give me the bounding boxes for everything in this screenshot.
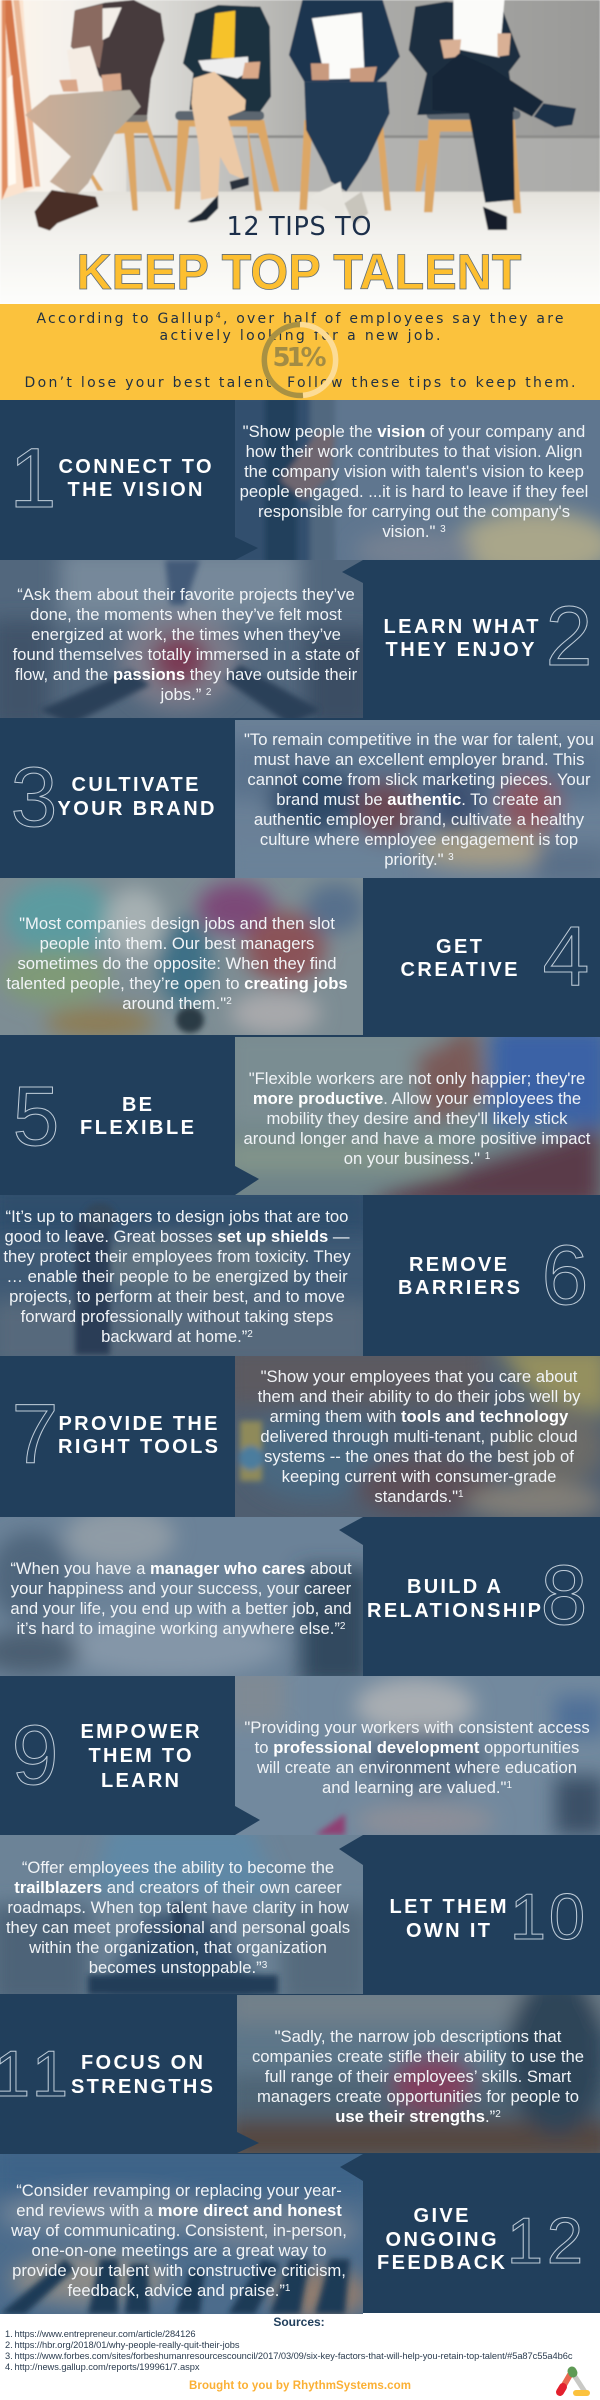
- sources list: https://hbr.org/2018/01/why-people-really-quit-their-jobs: [14, 2340, 240, 2350]
- quote: [244, 730, 594, 869]
- quote: companies create stifle their ability to use the: [252, 2047, 584, 2066]
- heading: BUILD A: [407, 1576, 501, 1598]
- quote: culture where employee engagement is top: [260, 830, 578, 849]
- quote: people engaged. ...it is hard to leave if they feel: [240, 482, 588, 501]
- quote: around longer and have a more positive impact: [244, 1129, 591, 1148]
- quote: use their strengths.”: [335, 2107, 495, 2126]
- sources heading: Sources:: [273, 2315, 325, 2329]
- sources list: https://www.forbes.com/sites/forbeshumanresourcescouncil/2017/03/09/six-key-factors-that-will-help-you-retain-top-talent/#5a87c55a4b6c: [14, 2351, 573, 2361]
- sources: [5, 2315, 573, 2372]
- quote: 1: [458, 1489, 464, 1500]
- panel: tip 5: [13, 1027, 600, 1207]
- intro text: actively looking for a new job.: [160, 328, 440, 344]
- heading: RIGHT TOOLS: [58, 1436, 218, 1458]
- quote: roadmaps. When top talent have clarity in how: [7, 1898, 350, 1917]
- title line: 12 tips to: 12 TIPS TO: [226, 212, 372, 242]
- quote: good to leave. Great bosses set up shields —: [4, 1227, 350, 1246]
- quote: way of communicating. Consistent, in-person,: [10, 2221, 347, 2240]
- heading: OWN IT: [406, 1920, 490, 1942]
- quote: [244, 1069, 591, 1168]
- quote: to professional development opportunities: [255, 1738, 579, 1757]
- heading: YOUR BRAND: [58, 798, 214, 820]
- donut chart: 51 percent: [264, 324, 336, 395]
- quote: vision.": [382, 522, 435, 541]
- quote: feedback, advice and praise.”: [68, 2281, 285, 2300]
- photo: figure on stairway: [0, 1835, 363, 1994]
- quote: mobility they desire and they'll likely stick: [267, 1109, 568, 1128]
- quote: "Sadly, the narrow job descriptions that: [275, 2027, 562, 2046]
- heading: ONGOING: [386, 2229, 496, 2251]
- heading: [80, 1721, 200, 1792]
- person 1: [71, 0, 165, 115]
- number 4: 4: [543, 909, 589, 1003]
- heading: BE: [122, 1094, 152, 1116]
- quote: “Offer employees the ability to become the: [22, 1858, 334, 1877]
- quote: cannot come from slick marketing pieces. Your: [247, 770, 591, 789]
- sources list: [5, 2329, 573, 2372]
- quote: 2: [495, 2109, 501, 2120]
- quote: flow, and the passions they have outside their: [15, 665, 358, 684]
- heading: THE VISION: [68, 479, 202, 501]
- photo: people shaking hands over papers: [0, 1517, 363, 1676]
- photo: man on ladder at a wall: [0, 1195, 363, 1356]
- heading: RELATIONSHIP: [367, 1600, 541, 1622]
- heading: [71, 2052, 213, 2098]
- credit line: Brought to you by RhythmSystems.com: [189, 2380, 411, 2392]
- quote: … enable their people to be energized by their: [6, 1267, 348, 1286]
- heading: [390, 1896, 506, 1942]
- quote: [6, 1858, 350, 1977]
- quote: within the organization, that organization: [28, 1938, 327, 1957]
- heading: [58, 1413, 218, 1458]
- panel: tip 2: [0, 550, 592, 730]
- number 5: 5: [13, 1069, 59, 1163]
- number 1: 1: [10, 431, 56, 525]
- quote: keeping current with consumer-grade: [282, 1467, 556, 1486]
- photo: blurred network of people: [235, 720, 600, 878]
- quote: becomes unstoppable.”: [89, 1958, 262, 1977]
- panel: tip 4: [0, 878, 589, 1039]
- quote: 3: [448, 852, 454, 863]
- sources list: 4.: [5, 2362, 13, 2372]
- intro text: [24, 311, 576, 391]
- number 7: 7: [12, 1387, 58, 1481]
- quote: 1: [285, 2283, 291, 2294]
- quote: "Providing your workers with consistent access: [244, 1718, 590, 1737]
- quote: sometimes do the opposite: When they find: [17, 954, 337, 973]
- quote: responsible for carrying out the company's: [258, 502, 570, 521]
- photo: hands holding light bulbs: [235, 1676, 600, 1835]
- heading: [367, 1576, 541, 1622]
- donut chart: 51 percent: 51%: [272, 343, 326, 373]
- header photo: four candidates seated on chairs: [0, 0, 600, 304]
- quote: 2: [206, 687, 212, 698]
- quote: people into them. Our best managers: [40, 934, 314, 953]
- icon: Rhythm Systems logo: [560, 2371, 587, 2393]
- number 12: 2: [547, 2204, 583, 2277]
- heading: FEEDBACK: [377, 2252, 506, 2274]
- panel: tip 12: [0, 2144, 583, 2319]
- quote: “Ask them about their favorite projects they’ve: [17, 585, 355, 604]
- quote: 1: [485, 1151, 491, 1162]
- quote: [6, 914, 348, 1013]
- panel: tip 10: [0, 1825, 585, 2005]
- heading: LET THEM: [390, 1896, 506, 1918]
- quote: forward professionally without taking steps: [21, 1307, 333, 1326]
- panel: tip 7: [12, 1346, 600, 1519]
- panel: tip 3: [11, 720, 600, 885]
- heading: FLEXIBLE: [80, 1117, 194, 1139]
- quote: your happiness and your success, your career: [11, 1579, 352, 1598]
- quote: found themselves totally immersed in a state of: [13, 645, 360, 664]
- heading: [400, 936, 518, 981]
- quote: jobs.”: [161, 685, 201, 704]
- quote: projects, to perform at their best, and to move: [9, 1287, 345, 1306]
- number 3: 3: [11, 750, 57, 844]
- quote: will create an environment where education: [256, 1758, 577, 1777]
- intro text: 4: [216, 311, 221, 320]
- panel: tip 8: [0, 1507, 587, 1687]
- quote: managers create opportunities for people to: [257, 2087, 579, 2106]
- panel: tip 1: [10, 395, 600, 580]
- heading: THEM TO: [88, 1745, 192, 1767]
- heading: LEARN WHAT: [384, 616, 538, 638]
- sources list: 2.: [5, 2340, 13, 2350]
- quote: done, the moments when they’ve felt most: [30, 605, 342, 624]
- quote: 2: [340, 1621, 346, 1632]
- number 10: [510, 1880, 585, 1953]
- heading: GET: [436, 936, 482, 958]
- quote: [252, 2027, 584, 2126]
- quote: “Consider revamping or replacing your year-: [16, 2181, 342, 2200]
- sources list: http://news.gallup.com/reports/199961/7.aspx: [14, 2362, 200, 2372]
- quote: 2: [247, 1329, 253, 1340]
- quote: [258, 1367, 581, 1506]
- heading: [58, 774, 214, 820]
- intro text: Don’t lose your best talent. Follow these tips to keep them.: [24, 375, 576, 391]
- heading: [377, 2205, 506, 2274]
- sources list: https://www.entrepreneur.com/article/284126: [14, 2329, 196, 2339]
- photo: tools on a bench: [235, 1356, 600, 1517]
- photo: hand and blurred city: [235, 400, 600, 560]
- quote: talented people, they’re open to creating jobs: [6, 974, 348, 993]
- sources list: 3.: [5, 2351, 13, 2361]
- number 2: 2: [546, 589, 592, 683]
- quote: priority.": [384, 850, 444, 869]
- number 11: [0, 2037, 68, 2110]
- intro text: , over half of employees say they are: [223, 311, 564, 327]
- quote: them and their ability to do their jobs well by: [258, 1387, 581, 1406]
- heading: BARRIERS: [398, 1277, 520, 1299]
- quote: energized at work, the times when they’ve: [31, 625, 341, 644]
- quote: "Show your employees that you care about: [261, 1367, 578, 1386]
- photo: raised fists against a sunset sky: [0, 2154, 363, 2314]
- photo: hands making a heart: [0, 560, 363, 718]
- quote: on your business.": [344, 1149, 480, 1168]
- quote: “When you have a manager who cares about: [10, 1559, 352, 1578]
- navy background: [0, 400, 600, 2313]
- quote: one-on-one meetings are a great way to: [31, 2241, 327, 2260]
- quote: more productive. Allow your employees the: [253, 1089, 581, 1108]
- person 2: [183, 5, 271, 112]
- heading: [398, 1254, 520, 1299]
- quote: brand must be authentic. To create an: [276, 790, 562, 809]
- heading: FOCUS ON: [81, 2052, 203, 2074]
- quote: they protect their employees from toxicity. They: [3, 1247, 351, 1266]
- number 8: 8: [541, 1548, 587, 1642]
- panel: tip 9: [12, 1666, 600, 1839]
- number 9: 9: [12, 1708, 58, 1802]
- number 6: 6: [542, 1228, 588, 1322]
- quote: the company vision with talent's vision to keep: [244, 462, 584, 481]
- intro text: According to Gallup: [36, 311, 213, 327]
- quote: [244, 1718, 590, 1797]
- quote: [240, 422, 588, 541]
- title line: keep top talent: KEEP TOP TALENT: [76, 244, 522, 300]
- quote: “It’s up to managers to design jobs that are too: [6, 1207, 348, 1226]
- quote: "Most companies design jobs and then slot: [19, 914, 335, 933]
- quote: authentic employer brand, cultivate a healthy: [254, 810, 585, 829]
- heading: EMPOWER: [80, 1721, 200, 1743]
- quote: and your life, you end up with a better job, and: [10, 1599, 352, 1618]
- yellow intro band: [0, 304, 600, 400]
- quote: trailblazers and creators of their own career: [14, 1878, 342, 1897]
- quote: [13, 585, 360, 704]
- panel: tip 11: [0, 1975, 600, 2160]
- number 10: 0: [549, 1880, 585, 1953]
- number 12: [507, 2204, 583, 2277]
- quote: arming them with tools and technology: [270, 1407, 569, 1426]
- quote: "Flexible workers are not only happier; they're: [249, 1069, 585, 1088]
- heading: CONNECT TO: [58, 456, 212, 478]
- quote: how their work contributes to that vision. Align: [246, 442, 582, 461]
- heading: CREATIVE: [400, 959, 518, 981]
- heading: LEARN: [101, 1770, 179, 1792]
- heading: CULTIVATE: [72, 774, 198, 796]
- quote: end reviews with a more direct and honest: [16, 2201, 342, 2220]
- quote: [10, 2181, 347, 2300]
- heading: GIVE: [414, 2205, 468, 2227]
- quote: it’s hard to imagine working anywhere else.”: [17, 1619, 340, 1638]
- quote: around them.": [122, 994, 226, 1013]
- heading: [80, 1094, 194, 1139]
- quote: [3, 1207, 351, 1346]
- quote: delivered through multi-tenant, public cloud: [260, 1427, 578, 1446]
- quote: systems -- the ones that do the best job of: [264, 1447, 574, 1466]
- quote: "Show people the vision of your company and: [243, 422, 585, 441]
- heading: PROVIDE THE: [58, 1413, 218, 1435]
- quote: and learning are valued.": [322, 1778, 506, 1797]
- photo: paint splash: [0, 878, 363, 1035]
- sources list: 1.: [5, 2329, 13, 2339]
- heading: STRENGTHS: [71, 2076, 213, 2098]
- quote: must have an excellent employer brand. This: [254, 750, 584, 769]
- quote: "To remain competitive in the war for talent, you: [244, 730, 594, 749]
- heading: REMOVE: [409, 1254, 507, 1276]
- chairs: [61, 120, 521, 213]
- quote: they can meet professional and personal goals: [6, 1918, 350, 1937]
- photo: person relaxing, blue sleeve: [235, 1037, 600, 1195]
- quote: provide your talent with constructive criticism,: [12, 2261, 346, 2280]
- heading: [384, 616, 538, 661]
- photo: woman in red under autumn tree: [237, 1995, 600, 2153]
- quote: 3: [440, 524, 446, 535]
- number 10: 1: [510, 1880, 546, 1953]
- quote: 2: [226, 996, 232, 1007]
- quote: 3: [262, 1960, 268, 1971]
- number 11: 1: [32, 2037, 68, 2110]
- quote: [10, 1559, 352, 1638]
- quote: 1: [506, 1780, 512, 1791]
- person 3: [289, 0, 400, 82]
- panel: tip 6: [0, 1185, 588, 1370]
- quote: standards.": [374, 1487, 458, 1506]
- heading: THEY ENJOY: [386, 639, 535, 661]
- person 4: [409, 2, 520, 115]
- heading: [58, 456, 212, 501]
- number 12: 1: [507, 2204, 543, 2277]
- title: [76, 212, 522, 300]
- quote: full range of their employees’ skills. Smart: [265, 2067, 572, 2086]
- quote: backward at home.”: [101, 1327, 247, 1346]
